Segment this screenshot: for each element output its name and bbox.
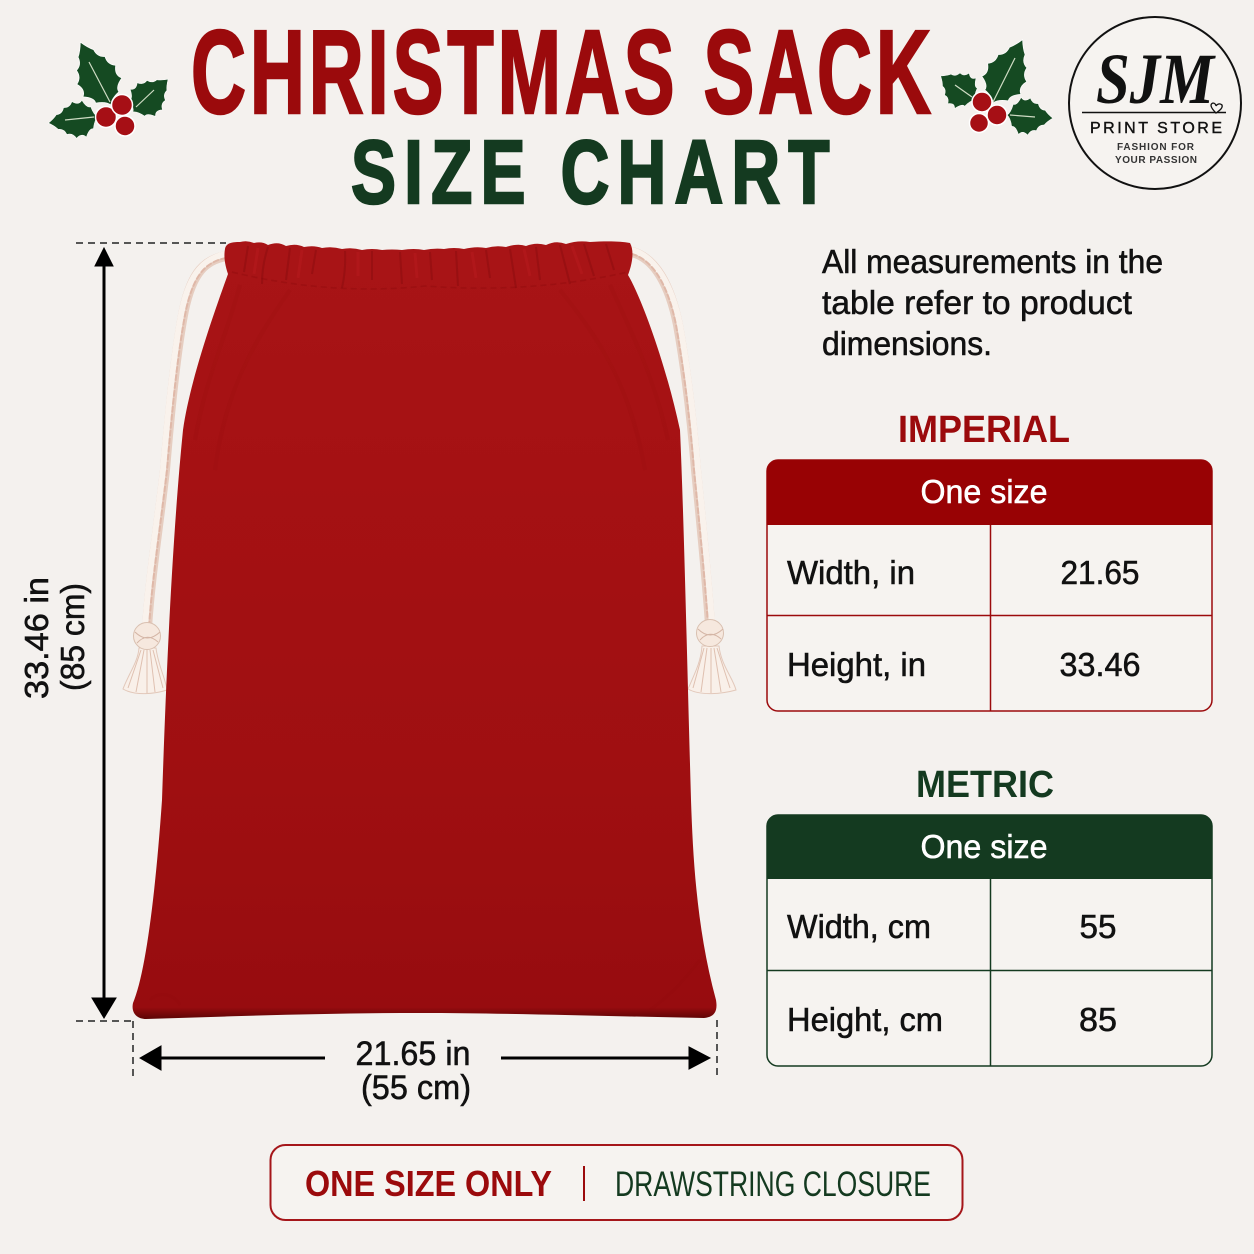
badge: one size only: [270, 1145, 962, 1220]
table: imperial: One size: [920, 473, 1048, 510]
badge: one size only: ONE SIZE ONLY: [305, 1163, 552, 1204]
rope: left: [145, 254, 226, 628]
note text: dimensions.: [822, 325, 992, 362]
table: metric: Width, cm: [787, 908, 931, 945]
table: metric: [767, 815, 1212, 1066]
label: height value: 33.46 in: [18, 577, 55, 699]
icon: holly left: [46, 33, 181, 142]
table: imperial: [767, 460, 1212, 711]
tassel: left: [123, 622, 167, 694]
badge: one size only: DRAWSTRING CLOSURE: [615, 1165, 931, 1204]
label: width value: 21.65 in: [356, 1035, 470, 1073]
logo: SJM Print Store: [1069, 17, 1241, 189]
arrow: height: [92, 248, 116, 1018]
table: metric: 55: [1080, 908, 1116, 945]
table: imperial: Width, in: [787, 554, 915, 591]
table: imperial: 33.46: [1060, 646, 1140, 683]
note text: All measurements in the: [822, 243, 1163, 280]
table: imperial: 21.65: [1060, 554, 1140, 591]
table: metric: One size: [920, 828, 1048, 865]
tassel: right: [688, 620, 736, 694]
logo: SJM Print Store: FASHION FOR: [1117, 142, 1195, 153]
label: height value: [18, 577, 91, 699]
label: height value: (85 cm): [54, 583, 91, 691]
rope: right: [632, 250, 712, 625]
arrow: width: [140, 1046, 710, 1070]
subtitle: Size Chart: SIZE CHART: [351, 122, 830, 222]
logo: SJM Print Store: SJM: [1096, 39, 1217, 119]
heading: Imperial: IMPERIAL: [898, 409, 1070, 451]
table: metric: 85: [1079, 1001, 1117, 1038]
title: Christmas Sack: CHRISTMAS SACK: [191, 7, 931, 139]
logo: SJM Print Store: YOUR PASSION: [1115, 155, 1197, 166]
table: imperial: Height, in: [787, 646, 926, 683]
table: metric: Height, cm: [787, 1001, 943, 1038]
logo: SJM Print Store: PRINT STORE: [1090, 120, 1222, 137]
label: width value: (55 cm): [361, 1069, 471, 1107]
icon: holly right: [930, 30, 1054, 137]
sack: [133, 241, 716, 1019]
note text: table refer to product: [822, 284, 1132, 321]
heading: Metric: METRIC: [916, 764, 1054, 806]
gathered ruffle: [150, 244, 700, 1010]
width dimension: [140, 1035, 710, 1107]
label: width value: [356, 1035, 471, 1107]
height dimension: [18, 243, 717, 1080]
note text: [822, 243, 1163, 362]
